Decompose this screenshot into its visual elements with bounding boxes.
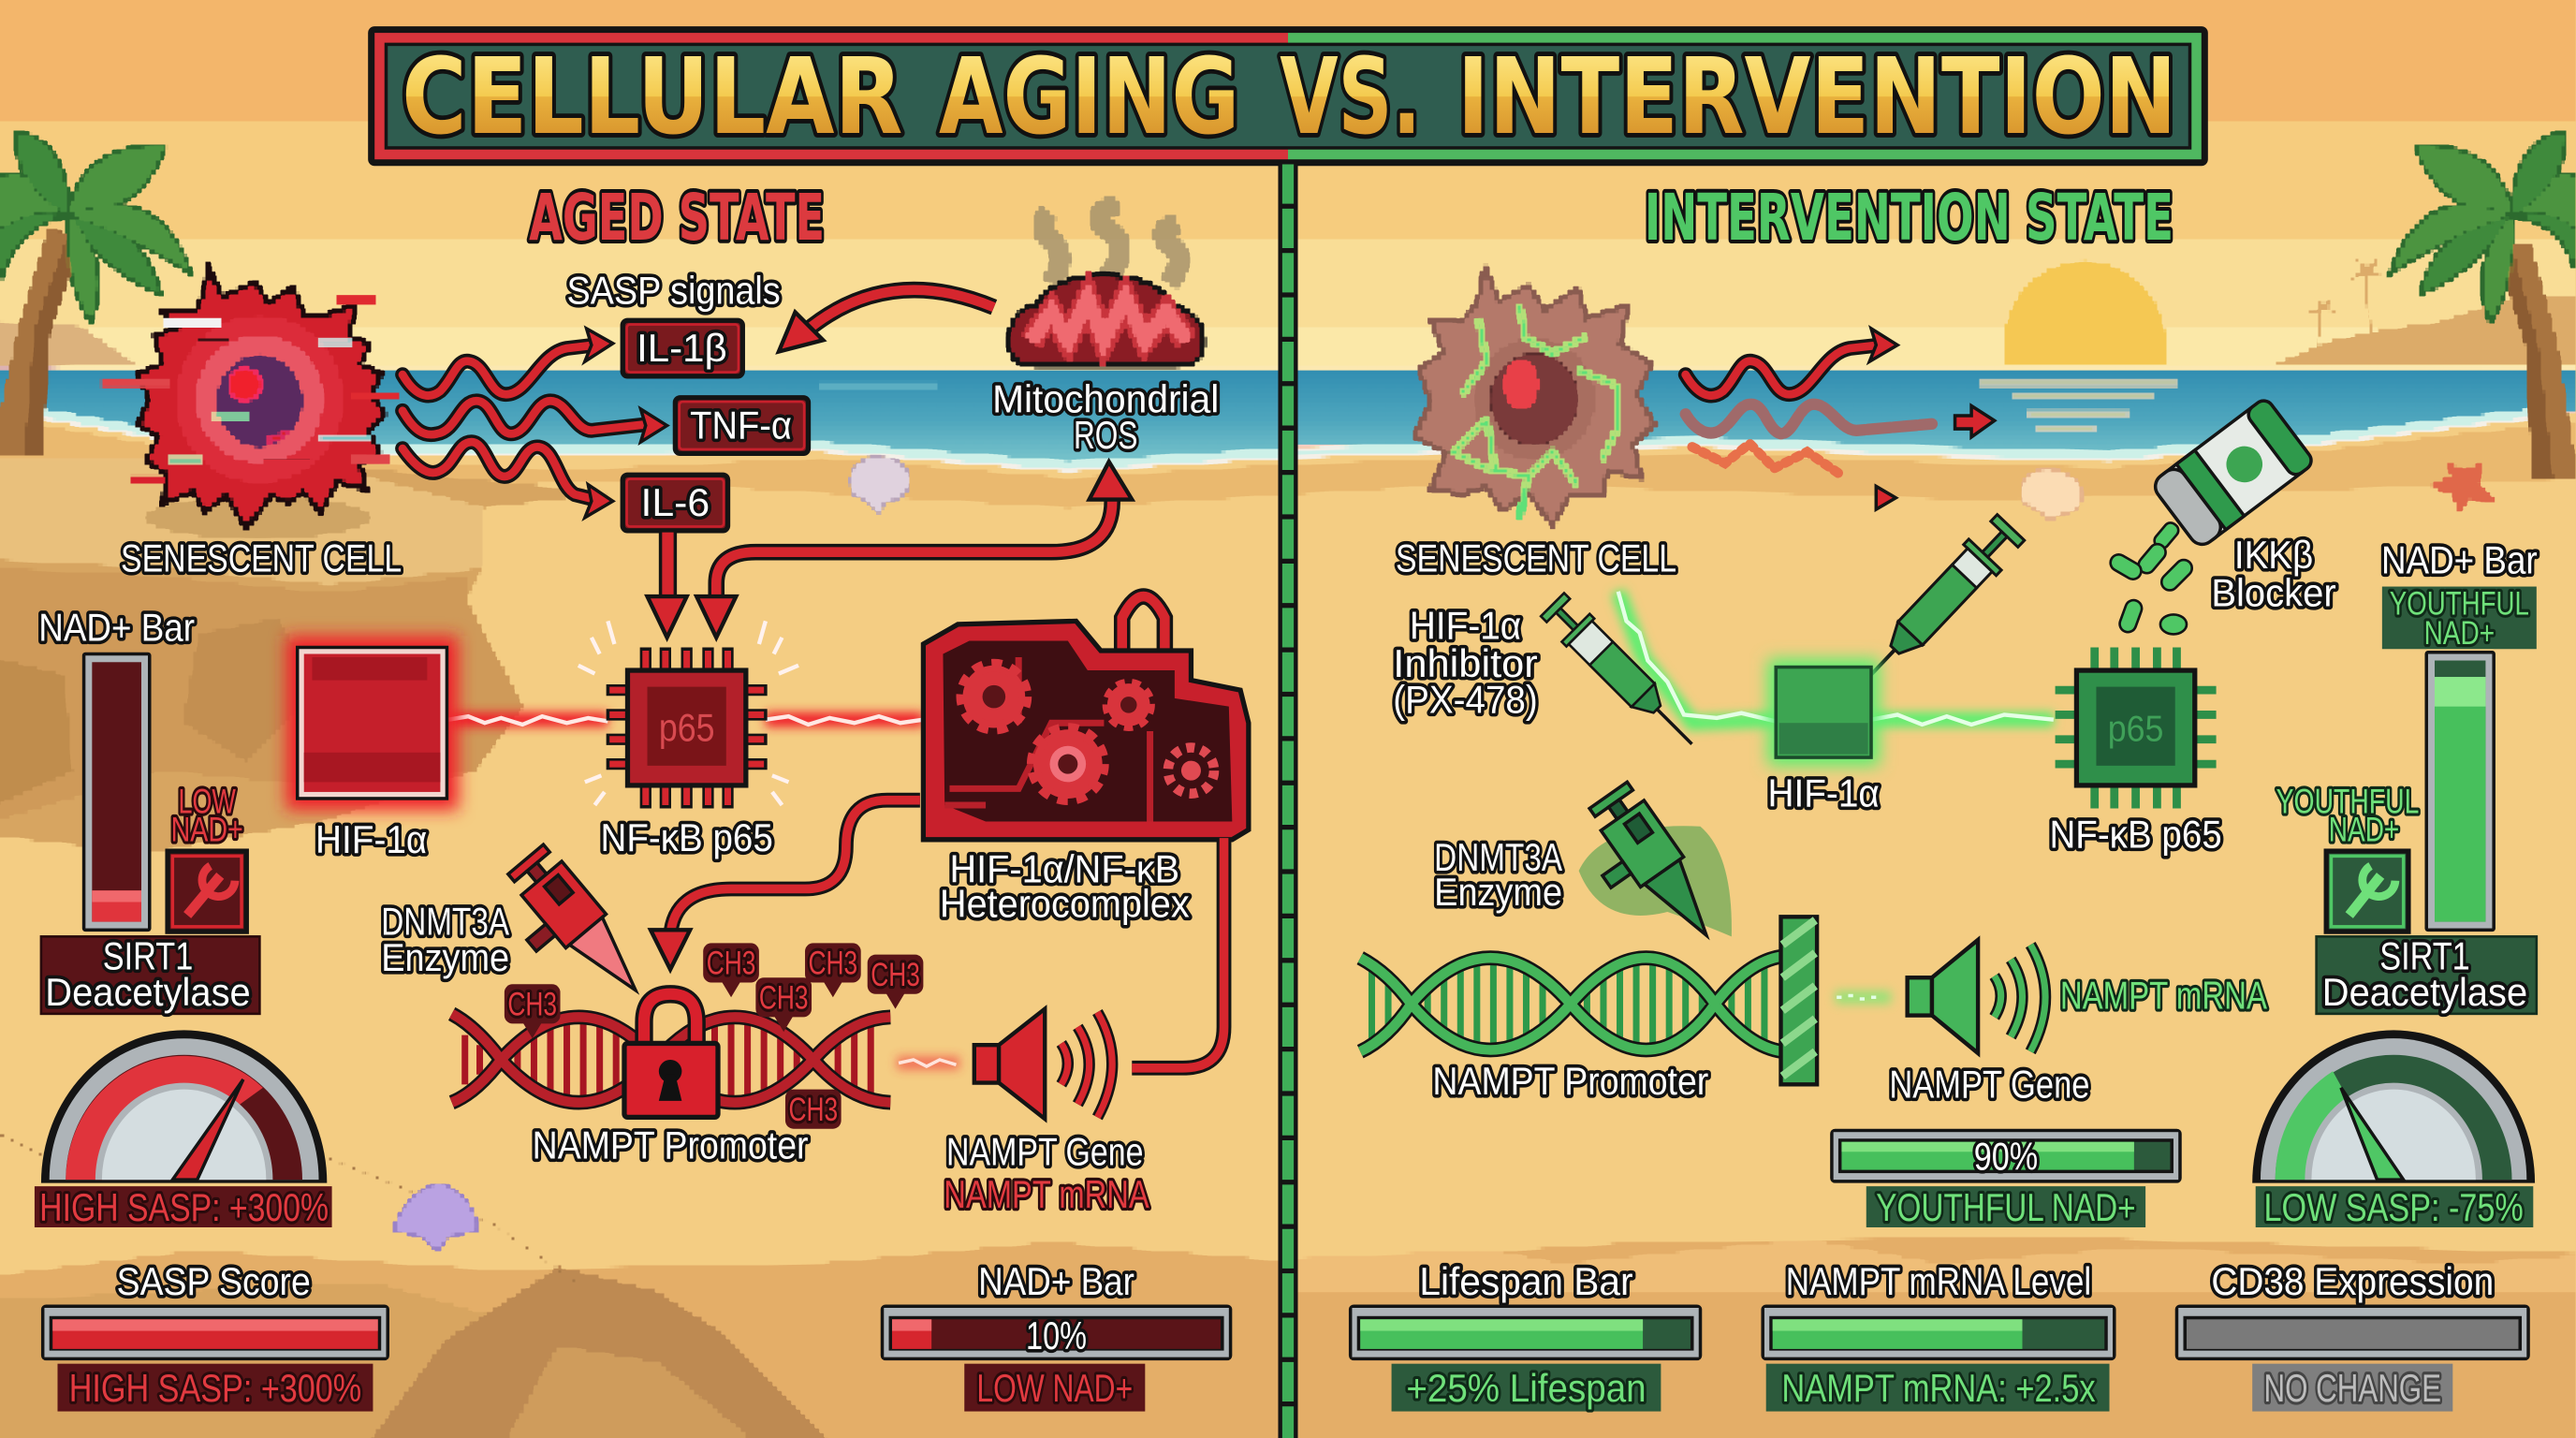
lightning: syringe effect and HIF to NF-κB <box>1618 592 2054 725</box>
NAD+ bar vertical (intervention): YOUTHFUL <box>2390 585 2529 622</box>
intervention senescent cell <box>1416 271 1653 522</box>
reduced SASP waves <box>1686 329 1995 509</box>
gauge: low SASP <box>2252 1030 2535 1229</box>
label: IKKβ blocker: Blocker <box>2211 571 2336 615</box>
label: NAMPT mRNA (intervention): NAMPT mRNA <box>2060 974 2267 1018</box>
label: heterocomplex <box>940 846 1190 925</box>
label: HIF-1α inhibitor <box>1393 604 1538 722</box>
weak signal: promoter to gene (aged) <box>897 1056 959 1070</box>
label: SASP Score <box>117 1259 311 1303</box>
label: HIF-1α inhibitor: (PX-478) <box>1393 678 1538 722</box>
gauge: high SASP <box>35 1030 332 1229</box>
starfish <box>2431 463 2494 509</box>
label: NAMPT gene and mRNA (aged): NAMPT Gene <box>946 1129 1144 1173</box>
tag: TNF-α <box>675 398 809 453</box>
stat: CD38 expression <box>2175 1259 2530 1412</box>
title border: red half <box>374 33 1288 159</box>
label: heterocomplex: Heterocomplex <box>940 881 1190 925</box>
label: youthful NAD+ <box>2276 783 2419 849</box>
title text: INTERVENTION <box>1457 37 2176 158</box>
lower sand band <box>0 1236 2576 1438</box>
stat: 90% NAD+ bar <box>1830 1129 2182 1229</box>
tag: IL-6 <box>622 475 728 531</box>
HIF-1α/NF-κB heterocomplex machine <box>923 596 1249 840</box>
ocean <box>0 368 2576 466</box>
label: senescent cell (aged): SENESCENT CELL <box>121 536 402 580</box>
SIRT1 deacetylase box (intervention): Deacetylase <box>2322 970 2527 1014</box>
stat: SASP score bar: HIGH SASP: +300% <box>69 1366 361 1410</box>
icon: pills <box>2107 521 2195 635</box>
shell: purple <box>394 1184 476 1249</box>
label: NAMPT gene and mRNA (aged) <box>944 1129 1149 1216</box>
center divider <box>1278 165 1298 1438</box>
active wave <box>1686 329 1897 396</box>
SASP wave arrows <box>402 329 667 518</box>
heading: intervention state: INTERVENTION STATE <box>1645 181 2174 256</box>
arrow: complex to NAMPT gene pipe <box>1132 838 1224 1068</box>
label: NAMPT promoter (aged): NAMPT Promoter <box>533 1123 809 1167</box>
tag: TNF-α: TNF-α <box>690 404 792 448</box>
green cracks <box>1454 304 1618 518</box>
signal: promoter to gene (intervention) <box>1835 990 1891 1004</box>
left hill <box>0 320 139 370</box>
icon: smoke above mitochondrion <box>1044 204 1178 283</box>
tag: IL-6: IL-6 <box>641 480 710 524</box>
label: HIF-1α (intervention): HIF-1α <box>1767 771 1880 815</box>
icon: wrench (aged) <box>168 851 246 932</box>
tag: IL-1β: IL-1β <box>637 326 727 370</box>
icon: DNMT3A drill (aged) <box>487 843 656 1023</box>
DNMT3A label (intervention): DNMT3A <box>1434 835 1562 879</box>
label: low NAD+ (vertical): LOW <box>178 783 236 821</box>
stat: NAD+ bar 10%: LOW NAD+ <box>976 1366 1133 1410</box>
gears <box>963 666 1214 799</box>
label: IKKβ blocker: IKKβ <box>2234 533 2313 577</box>
icon: syringe to HIF-1α <box>1840 512 2027 706</box>
icon: speaker (intervention) <box>1908 940 2045 1053</box>
label: youthful NAD+: YOUTHFUL <box>2276 783 2419 821</box>
stat: lifespan bar <box>1349 1259 1702 1412</box>
label: NAMPT mRNA Level <box>1786 1259 2091 1303</box>
label: NAD+ Bar <box>978 1259 1134 1303</box>
NF-κB p65 chip (intervention): p65 <box>2108 710 2163 750</box>
label: NF-κB p65 (intervention): NF-κB p65 <box>2049 813 2222 857</box>
label: mitochondrial ROS: ROS <box>1074 413 1137 457</box>
shell: peach <box>2023 470 2082 520</box>
palm tree left <box>0 133 189 453</box>
SIRT1 deacetylase box (intervention): SIRT1 <box>2379 933 2470 977</box>
CH3 methyl tags <box>505 943 923 1129</box>
palm tree right <box>2392 133 2576 477</box>
stat: NAMPT mRNA level <box>1761 1259 2116 1412</box>
icon: pill bottle <box>2150 397 2315 550</box>
label: senescent cell (intervention): SENESCENT CELL <box>1396 536 1676 580</box>
label: Lifespan Bar <box>1419 1259 1633 1303</box>
stat: NAD+ bar 10% <box>881 1259 1232 1412</box>
CH3 methyl tags: CH3 <box>871 957 920 993</box>
label: NAMPT gene (intervention): NAMPT Gene <box>1889 1062 2089 1106</box>
lightning: HIF to NF-κB and NF-κB to complex <box>448 716 923 725</box>
DNMT3A label (aged): DNMT3A <box>381 900 509 944</box>
label: mitochondrial ROS <box>992 377 1219 457</box>
arrow: complex to NAMPT promoter <box>651 800 920 969</box>
label: youthful NAD+: NAD+ <box>2329 811 2399 849</box>
SIRT1 deacetylase box (aged) <box>41 933 259 1014</box>
DNA helix green <box>1360 956 1782 1051</box>
label: NAMPT promoter (intervention): NAMPT Promoter <box>1432 1059 1708 1103</box>
CH3 methyl tags: CH3 <box>707 946 755 982</box>
DNMT3A label (intervention): Enzyme <box>1434 870 1562 914</box>
label: HIF-1α inhibitor: Inhibitor <box>1393 641 1538 685</box>
label: IKKβ blocker <box>2211 533 2336 615</box>
left cliff <box>0 459 624 855</box>
label: NAMPT gene and mRNA (aged): NAMPT mRNA <box>944 1172 1149 1216</box>
icon: speaker (aged) <box>974 1009 1112 1119</box>
label: CD38 Expression <box>2211 1259 2494 1303</box>
heading: aged state: AGED STATE <box>529 181 825 256</box>
stat: SASP score bar <box>41 1259 389 1412</box>
NAD+ bar vertical (aged) <box>38 605 195 932</box>
label: heterocomplex: HIF-1α/NF-κB <box>949 846 1179 890</box>
fading wave <box>1686 404 1995 437</box>
label: SASP signals: SASP signals <box>567 269 781 313</box>
SIRT1 deacetylase box (aged): Deacetylase <box>45 970 251 1014</box>
HIF-1α block (intervention) <box>1767 659 1880 766</box>
wave to IL-6 <box>402 442 613 518</box>
stat: NAMPT mRNA level: NAMPT mRNA: +2.5x <box>1781 1366 2096 1410</box>
shell: lilac <box>852 459 909 511</box>
spark marks <box>578 621 798 805</box>
CH3 methyl tags: CH3 <box>809 946 857 982</box>
CH3 methyl tags: CH3 <box>788 1092 838 1128</box>
label: HIF-1α (aged): HIF-1α <box>315 817 427 861</box>
SIRT1 deacetylase box (aged): SIRT1 <box>103 933 193 977</box>
label: mitochondrial ROS: Mitochondrial <box>992 377 1219 421</box>
arrow: IL-6 down to NF-κB <box>648 531 687 638</box>
HIF-1α block (aged) <box>285 636 459 810</box>
stat: 90% NAD+ bar: 90% <box>1974 1135 2038 1179</box>
DNA helix red with NAMPT promoter <box>452 1014 890 1103</box>
NF-κB p65 chip (aged): p65 <box>659 706 714 750</box>
SIRT1 deacetylase box (intervention) <box>2317 933 2537 1014</box>
icon: DNMT3A drill inactive <box>1567 780 1732 964</box>
glitch marks <box>102 298 400 481</box>
icon: wrench (intervention) <box>2326 851 2408 932</box>
stat: CD38 expression: NO CHANGE <box>2263 1366 2441 1410</box>
DNMT3A label (aged): Enzyme <box>381 935 509 979</box>
DNMT3A label (intervention) <box>1434 835 1562 914</box>
arrow: mitochondrion to IL-1β <box>779 290 994 352</box>
title border: green half <box>1288 33 2202 159</box>
gauge: low SASP: LOW SASP: -75% <box>2263 1185 2524 1229</box>
label: NF-κB p65 (aged): NF-κB p65 <box>601 815 773 859</box>
label: NAD+ Bar <box>2381 538 2538 582</box>
title banner <box>368 26 2208 166</box>
label: NAD+ Bar <box>38 605 195 649</box>
icon: padlock <box>624 994 718 1117</box>
aged senescent cell <box>102 271 400 526</box>
stat: NAD+ bar 10%: 10% <box>1026 1313 1087 1357</box>
CH3 methyl tags: CH3 <box>507 987 557 1023</box>
NAD+ bar vertical (intervention): NAD+ <box>2424 615 2495 652</box>
title text: AGING <box>939 37 1239 158</box>
label: low NAD+ (vertical): NAD+ <box>171 811 243 849</box>
lower-left rocks <box>0 1282 822 1438</box>
title text: CELLULAR <box>402 37 902 158</box>
stat: lifespan bar: +25% Lifespan <box>1406 1366 1647 1410</box>
stat: 90% NAD+ bar: YOUTHFUL NAD+ <box>1876 1185 2136 1229</box>
broken wave fragments <box>1692 444 1895 509</box>
island with distant palms <box>2269 253 2576 365</box>
tag: IL-1β <box>622 320 742 376</box>
wave to IL-1β <box>402 329 613 396</box>
foam <box>0 411 2545 466</box>
water highlights <box>1980 381 2176 433</box>
gauge: high SASP: HIGH SASP: +300% <box>39 1185 329 1229</box>
barrier block <box>1781 917 1817 1084</box>
title text <box>402 37 2176 158</box>
DNMT3A label (aged) <box>381 900 509 979</box>
wave to TNF-α <box>402 401 667 442</box>
label: HIF-1α inhibitor: HIF-1α <box>1410 604 1521 648</box>
NF-κB p65 chip (aged) <box>578 621 798 808</box>
sun <box>2002 259 2167 365</box>
CH3 methyl tags: CH3 <box>759 980 809 1017</box>
label: low NAD+ (vertical) <box>171 783 243 849</box>
icon: mitochondrion <box>1010 276 1203 365</box>
title text: VS. <box>1280 37 1421 158</box>
icon: syringe inhibitor <box>1539 591 1705 758</box>
wet sand <box>0 420 2576 509</box>
NAD+ bar vertical (intervention) <box>2381 538 2538 932</box>
arrow: NF-κB to mitochondrial ROS (double headed) <box>696 462 1132 638</box>
NF-κB p65 chip (intervention) <box>2056 647 2217 808</box>
